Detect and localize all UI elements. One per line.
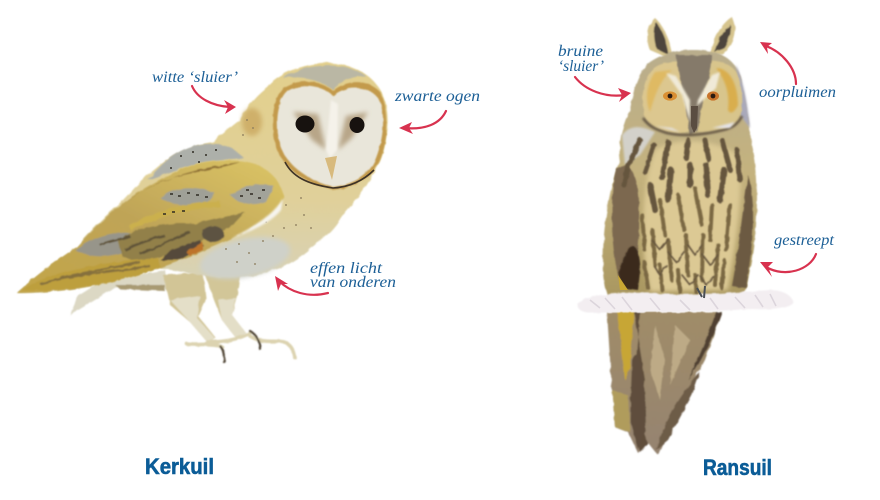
note: gestreept: gestreept [774,232,835,249]
tail [607,312,722,455]
note: effen licht van onderen: van onderen [310,274,396,291]
beak [691,106,698,133]
note: effen licht van onderen: effen licht [310,260,383,277]
note: bruine sluier: bruine [558,43,603,60]
left white brow [666,73,690,122]
legs and feet [163,272,295,362]
head [273,66,387,190]
beak [325,156,337,180]
note: oorpluimen: oorpluimen [759,84,836,101]
right facial disc [698,60,742,132]
yellow toe strip [618,275,628,290]
white wing edge [232,198,283,238]
grey crown [283,66,366,90]
tail and under feathers [70,270,168,315]
center stripe [676,55,712,135]
right eye [707,91,719,101]
right eye [350,117,364,133]
facial disc [277,86,383,187]
note: bruine sluier: ‘sluier’ [558,58,604,75]
left ear [647,18,673,60]
left shoulder highlight [622,127,655,165]
note: witte sluier: witte ‘sluier’ [152,69,238,86]
note: zwarte ogen: zwarte ogen [394,88,480,105]
note: gestreept [760,232,835,277]
left yellow rim [647,70,672,112]
facial disc rim [273,82,387,190]
disc lower dark edge [285,162,374,188]
left eye [663,91,677,101]
illustration: long-eared owl [577,17,793,455]
eye shading [293,112,368,150]
wing specks [163,150,265,214]
panel: ransuil [558,17,836,480]
nose ridge [326,100,338,158]
grey shoulder [148,144,244,180]
right white brow [697,72,720,106]
right ear [709,17,735,55]
note: witte sluier [152,69,238,114]
belly speckles [225,120,312,264]
belly shading [196,230,294,286]
head [643,55,742,135]
left eye [296,116,314,132]
light chest [643,141,740,292]
note: oorpluimen [759,42,836,101]
perch with claw [577,286,793,313]
name: Kerkuil: Kerkuil [145,454,214,479]
wing [17,160,283,293]
right yellow rim [716,68,738,112]
illustration: barn owl [17,63,388,362]
chest streaks [624,140,740,292]
body [17,63,388,293]
wing right dark patch [732,175,753,288]
note: bruine sluier [558,43,631,102]
panel: kerkuil [17,63,480,479]
body [603,50,757,300]
neck ochre smudge [242,108,262,136]
note: effen licht van onderen [275,260,396,295]
note: zwarte ogen [394,88,480,134]
name: Ransuil: Ransuil [703,455,772,480]
wing left black patch [618,246,640,290]
collar [643,116,742,135]
white collar patch [655,122,735,132]
wing left dark patch [612,166,639,288]
left facial disc [643,61,690,133]
right bluish edge [736,65,750,128]
